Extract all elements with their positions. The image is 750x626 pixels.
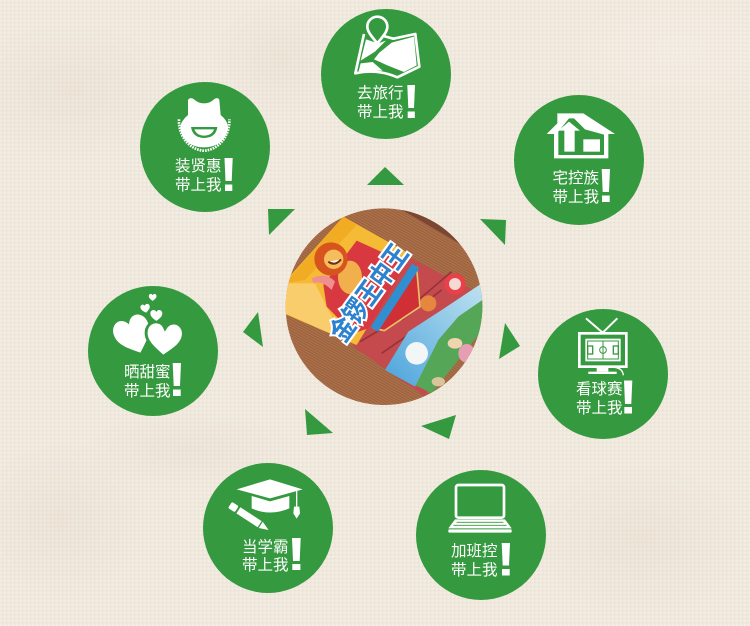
badge: bargain hunter: [140, 82, 270, 212]
badge: travel: [321, 9, 451, 139]
label line 2: 带上我: [451, 561, 498, 579]
exclamation mark: [173, 363, 181, 396]
badge: watching football: [538, 309, 668, 439]
exclamation mark: [407, 85, 415, 118]
label: 加班控: [451, 542, 498, 560]
arrow: right: [499, 323, 520, 359]
icon: graduation cap and pencil: [228, 479, 303, 533]
label line 2: 带上我: [552, 188, 599, 206]
exclamation mark: [224, 158, 233, 191]
product name on package: 金锣王中王: [324, 239, 414, 347]
label line 2: 带上我: [357, 103, 404, 121]
label line 2: 带上我: [576, 399, 623, 417]
icon: map with pin: [355, 17, 419, 77]
exclamation mark: [502, 543, 510, 576]
badge: top student: [203, 463, 333, 593]
arrow: upper right: [480, 219, 506, 245]
arrow: upper left: [268, 209, 295, 235]
arrow: lower left: [305, 409, 333, 435]
exclamation mark: [602, 169, 610, 202]
label: 去旅行: [357, 84, 404, 102]
exclamation mark: [624, 380, 632, 414]
center product photo: [286, 208, 482, 405]
wooden mat: [286, 208, 482, 405]
exclamation mark: [292, 538, 301, 570]
label: 装贤惠: [175, 157, 222, 175]
arrow: lower right: [421, 415, 456, 439]
sausage package: [283, 217, 485, 397]
icon: house: [547, 113, 615, 158]
badge: overtime: [416, 470, 546, 600]
label line 2: 带上我: [242, 556, 289, 574]
label: 看球赛: [576, 379, 623, 398]
label: 宅控族: [552, 169, 599, 187]
arrow: left: [243, 312, 263, 347]
badge: sweethearts: [88, 286, 218, 416]
icon: hearts: [110, 294, 184, 359]
icon: laptop: [448, 485, 512, 533]
arrow: top: [367, 167, 404, 185]
label: 晒甜蜜: [124, 363, 171, 381]
label line 2: 带上我: [124, 382, 171, 400]
label line 2: 带上我: [175, 176, 222, 194]
icon: television: [579, 318, 626, 375]
lion mascot: [312, 242, 362, 294]
badge: homebody: [514, 95, 644, 225]
label: 当学霸: [242, 538, 289, 556]
icon: bib: [179, 98, 229, 151]
